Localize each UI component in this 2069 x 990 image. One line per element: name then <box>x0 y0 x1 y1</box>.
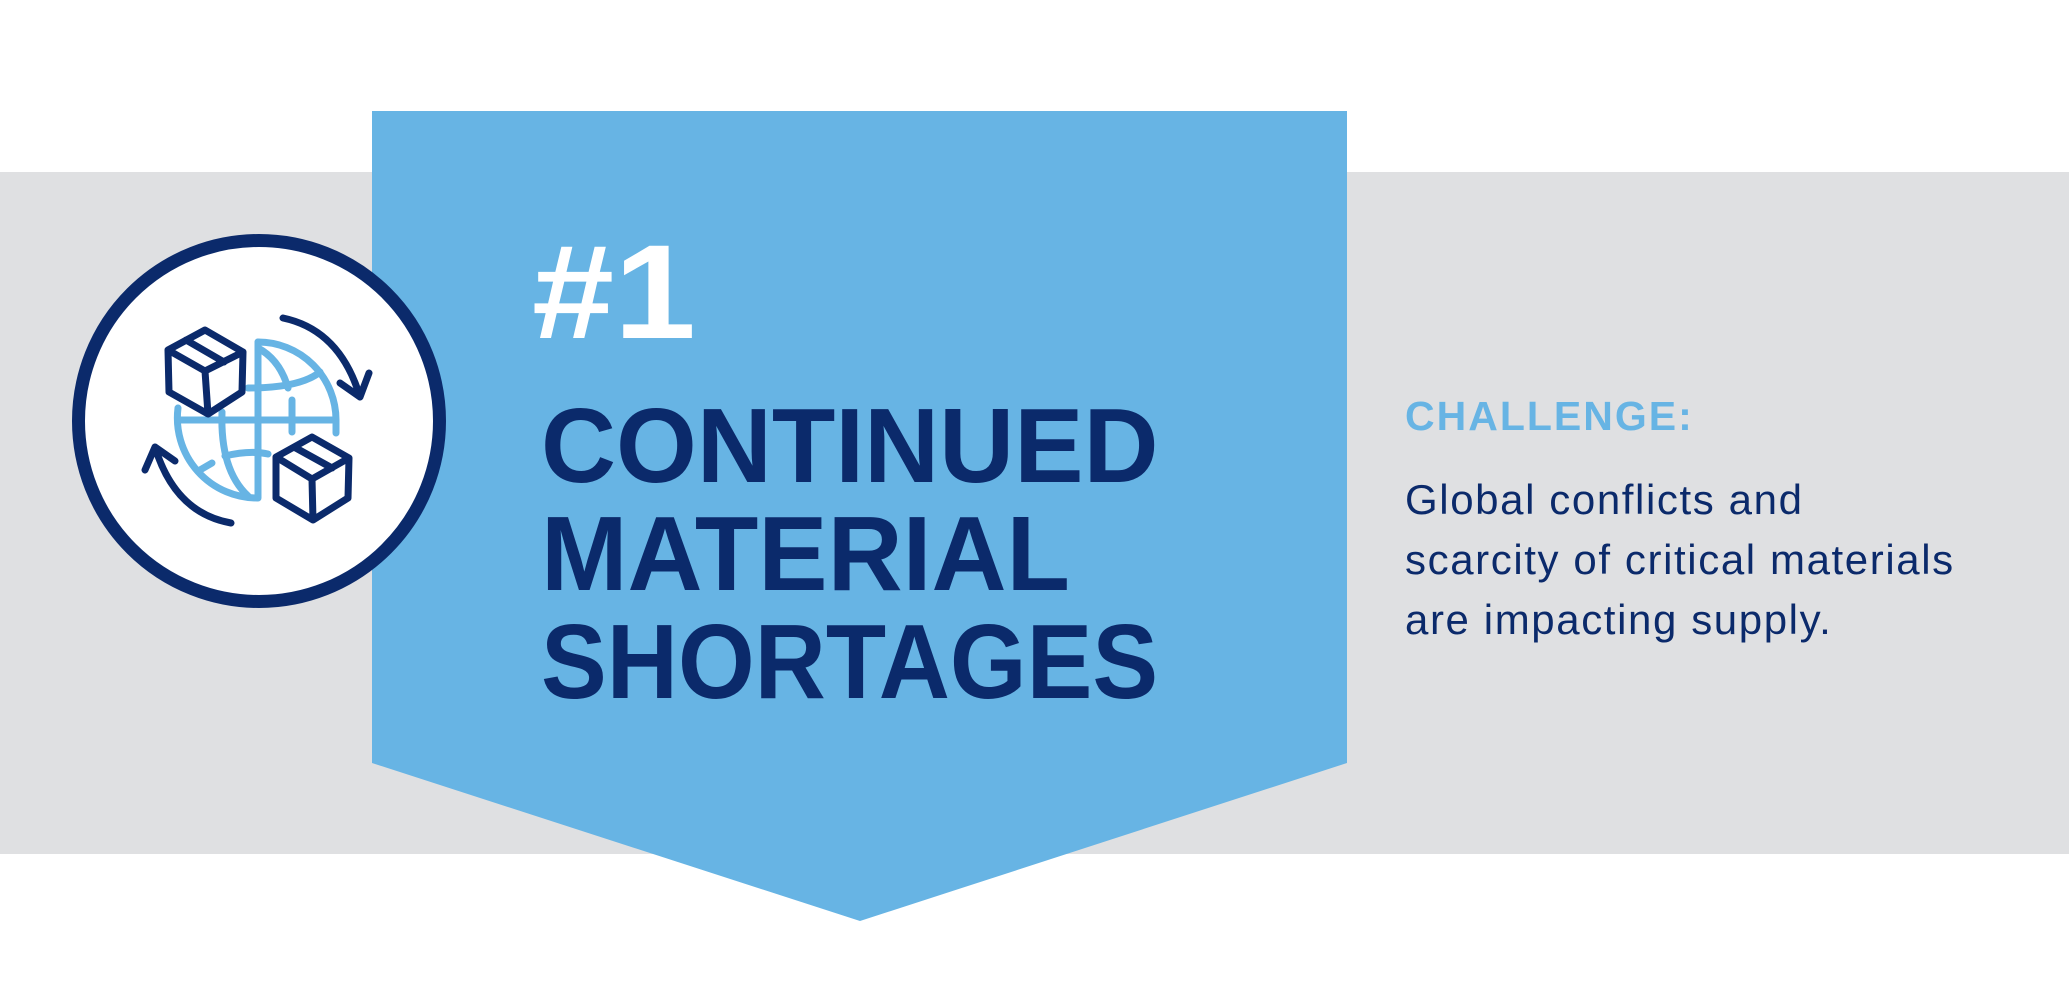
heading: title: CONTINUED <box>541 387 1159 505</box>
icon circle <box>72 234 446 608</box>
text: challenge description <box>1405 476 1955 643</box>
heading: title: SHORTAGES <box>541 603 1158 721</box>
gray band <box>0 172 2069 854</box>
text: challenge description: Global conflicts and <box>1405 476 1804 523</box>
text: challenge description: scarcity of critical materials <box>1405 536 1955 583</box>
label: challenge: CHALLENGE: <box>1405 393 1694 439</box>
text: challenge description: are impacting supply. <box>1405 596 1832 643</box>
heading: title <box>541 387 1159 721</box>
heading: title: MATERIAL <box>541 495 1070 613</box>
icon: globe with boxes and arrows <box>142 314 372 526</box>
heading: #1: #1 <box>532 218 696 367</box>
